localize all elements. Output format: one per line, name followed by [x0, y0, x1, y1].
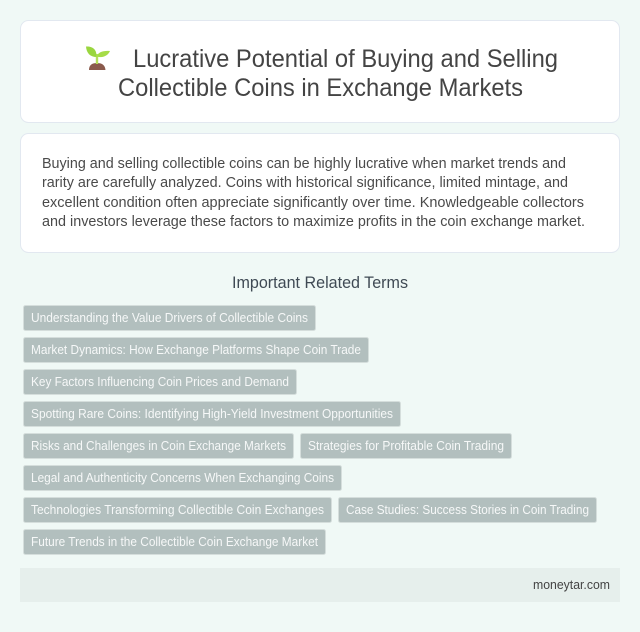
footer bar — [20, 568, 620, 602]
tag: technologies: Technologies Transforming Collectible Coin Exchanges — [31, 503, 324, 517]
heading: important related terms: Important Related Terms — [232, 274, 408, 292]
summary text: rarity are carefully analyzed. Coins with historical significance, limited mintage, and — [42, 175, 568, 191]
footer source text: moneytar.com — [533, 578, 610, 592]
panel: summary paragraph — [20, 134, 620, 252]
tag: risks and challenges — [24, 434, 294, 458]
title text: Lucrative Potential of Buying and Selling — [133, 45, 558, 73]
summary text: Buying and selling collectible coins can be highly lucrative when market trends and — [42, 156, 566, 172]
tag: value drivers — [24, 306, 316, 330]
title text: Collectible Coins in Exchange Markets — [118, 74, 523, 102]
tag: value drivers: Understanding the Value Drivers of Collectible Coins — [31, 311, 308, 325]
tag: key factors — [24, 370, 296, 394]
tag: legal and authenticity — [24, 466, 342, 490]
tag: strategies: Strategies for Profitable Coin Trading — [308, 439, 504, 453]
summary text: excellent condition often appreciate significantly over time. Knowledgeable collectors — [42, 195, 584, 211]
tag: market dynamics — [24, 338, 368, 362]
tag: case studies — [338, 498, 596, 522]
panel: title card — [20, 20, 620, 122]
icon: seedling — [86, 46, 110, 70]
tag: risks and challenges: Risks and Challenges in Coin Exchange Markets — [31, 439, 286, 453]
tag: spotting rare coins: Spotting Rare Coins: Identifying High-Yield Investment Opportunities — [31, 407, 393, 421]
summary text: and investors leverage these factors to maximize profits in the coin exchange market. — [42, 214, 585, 230]
tag: case studies: Case Studies: Success Stories in Coin Trading — [346, 503, 589, 517]
tag: key factors: Key Factors Influencing Coin Prices and Demand — [31, 375, 289, 389]
tag: legal and authenticity: Legal and Authenticity Concerns When Exchanging Coins — [31, 471, 334, 485]
tag: technologies — [24, 498, 332, 522]
tag: market dynamics: Market Dynamics: How Exchange Platforms Shape Coin Trade — [31, 343, 361, 357]
tag: future trends — [24, 530, 326, 554]
tag: spotting rare coins — [24, 402, 400, 426]
tag: strategies — [300, 434, 512, 458]
tag: future trends: Future Trends in the Collectible Coin Exchange Market — [31, 535, 318, 549]
